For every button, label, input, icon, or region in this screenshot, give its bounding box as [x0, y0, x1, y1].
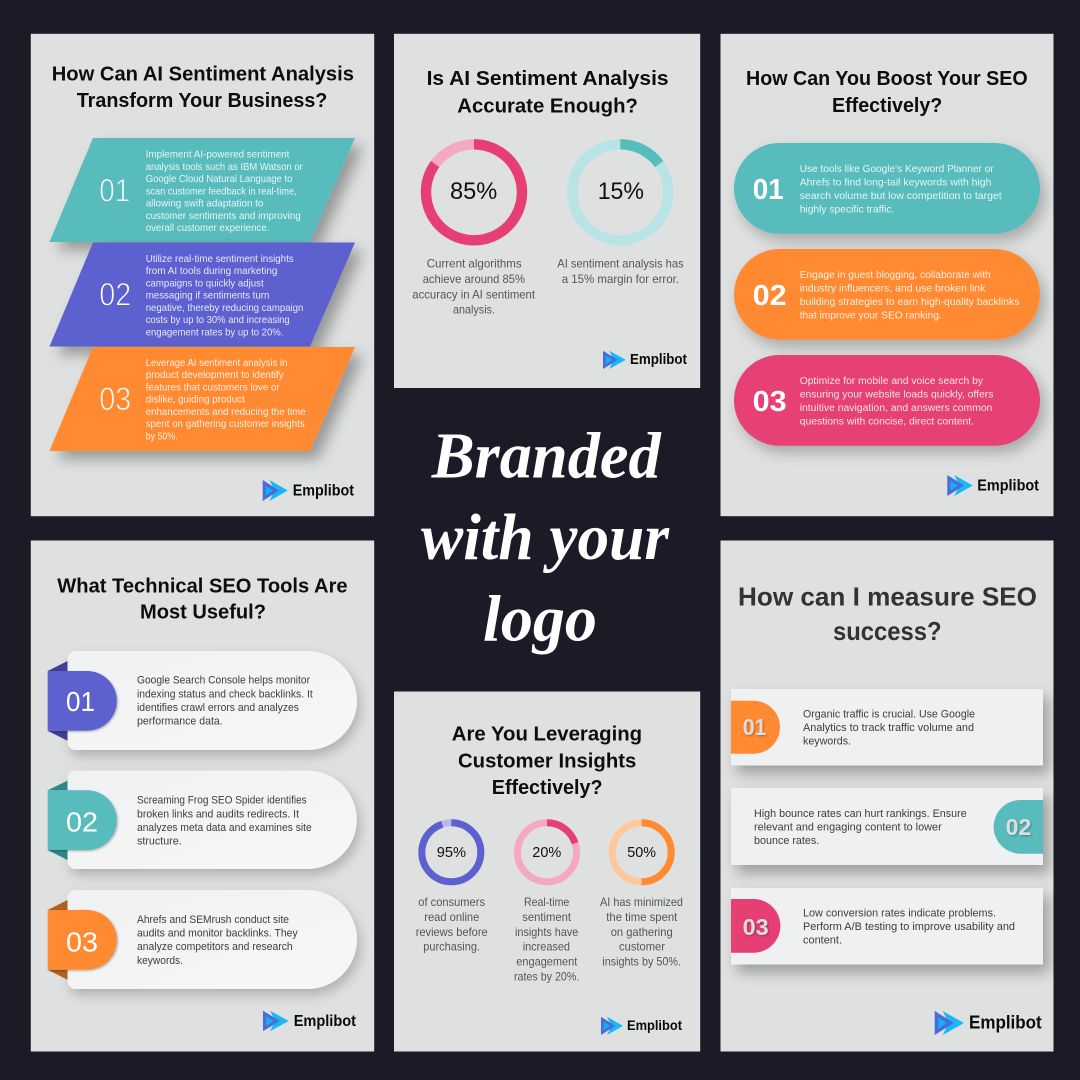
- caption: 85%: achieve around 85%: [423, 272, 525, 286]
- central title: Branded with your logo: with your: [421, 501, 670, 574]
- heading: panel 6: success?: [833, 616, 942, 646]
- step 02 pill: building strategies to earn high-quality backlinks: [800, 296, 1019, 308]
- step 03 parallelogram: by 50%.: [146, 430, 178, 442]
- heading: panel 2: Is AI Sentiment Analysis: [427, 67, 669, 90]
- tool card 01: [48, 651, 357, 750]
- step 03 pill: 03: [753, 386, 787, 418]
- tool card 01: performance data.: [137, 716, 223, 728]
- donut chart: 50%: 50%: [627, 845, 656, 861]
- donut chart: 95%: 95%: [437, 845, 466, 861]
- step 03 parallelogram: dislike, guiding product: [146, 394, 245, 406]
- caption: 50%: customer: [619, 940, 665, 954]
- heading: panel 5: Customer Insights: [458, 749, 636, 772]
- step 01 parallelogram: [50, 138, 355, 242]
- logo: panel 3: [947, 475, 1039, 496]
- step 01 pill: Ahrefs to find long-tail keywords with high: [800, 176, 992, 188]
- heading: panel 4: [57, 574, 348, 623]
- tool card 01: Google Search Console helps monitor: [137, 675, 310, 687]
- panel: Is AI Sentiment Analysis Accurate Enough: [394, 34, 700, 388]
- caption: 95%: reviews before: [416, 925, 488, 939]
- caption: 15%: AI sentiment analysis has: [557, 257, 684, 271]
- panel: How Can AI Sentiment Analysis Transform Your Business: [31, 34, 374, 516]
- step 01 parallelogram: scan customer feedback in real-time,: [146, 186, 297, 198]
- heading: panel 2: [427, 67, 669, 117]
- tool card 02: analyzes meta data and examines site: [137, 822, 312, 834]
- heading: panel 3: How Can You Boost Your SEO: [746, 67, 1028, 90]
- step 02 pill: 02: [753, 280, 787, 312]
- panel: Are You Leveraging Customer Insights Effectively: [394, 692, 700, 1052]
- caption: 85%: accuracy in AI sentiment: [412, 287, 536, 301]
- tool card 01: 01: [66, 686, 95, 717]
- heading: panel 1: How Can AI Sentiment Analysis: [52, 63, 354, 86]
- step 01 parallelogram: 01: [99, 173, 130, 209]
- heading: panel 4: Most Useful?: [140, 600, 266, 623]
- donut chart: 85%: 85%: [450, 178, 497, 205]
- tool card 01: identifies crawl errors and analyzes: [137, 702, 300, 714]
- metric card 02: [731, 788, 1043, 865]
- step 02 parallelogram: [50, 242, 355, 346]
- logo: panel 5: [601, 1017, 682, 1035]
- caption: 20%: Real-time: [524, 895, 570, 909]
- panel: How Can You Boost Your SEO Effectively: [720, 34, 1054, 516]
- caption: 95%: purchasing.: [423, 940, 480, 954]
- heading: panel 6: How can I measure SEO: [738, 582, 1037, 612]
- step 02 pill: Engage in guest blogging, collaborate with: [800, 269, 991, 281]
- step 01 parallelogram: customer sentiments and improving: [146, 210, 301, 222]
- step 03 parallelogram: product development to identify: [146, 369, 284, 381]
- step 03 pill: intuitive navigation, and answers common: [800, 402, 993, 414]
- logo: panel 4: [263, 1011, 356, 1031]
- step 01 pill: 01: [753, 174, 784, 206]
- caption: 15%: a 15% margin for error.: [562, 272, 679, 286]
- heading: panel 5: Are You Leveraging: [452, 723, 642, 746]
- caption: 85%: analysis.: [453, 303, 495, 317]
- step 03 parallelogram: spent on gathering customer insights: [146, 418, 305, 430]
- caption: 20%: insights have: [515, 925, 579, 939]
- step 01 parallelogram: Implement AI-powered sentiment: [146, 149, 289, 161]
- step 02 parallelogram: from AI tools during marketing: [146, 265, 278, 277]
- tool card 03: Ahrefs and SEMrush conduct site: [137, 914, 289, 926]
- step 03 pill: Optimize for mobile and voice search by: [800, 375, 984, 387]
- donut chart: 20%: 20%: [532, 845, 561, 861]
- metric card 03: 03: [743, 914, 769, 940]
- step 01 parallelogram: analysis tools such as IBM Watson or: [146, 161, 303, 173]
- caption: 20%: [514, 895, 579, 984]
- metric card 02: 02: [1006, 814, 1031, 840]
- caption: 15%: [557, 257, 684, 286]
- step 02 parallelogram: engagement rates by up to 20%.: [146, 326, 283, 338]
- logo: panel 6: Emplibot: [969, 1013, 1042, 1033]
- heading: panel 4: What Technical SEO Tools Are: [57, 574, 348, 597]
- caption: 50%: on gathering: [611, 925, 673, 939]
- central title: Branded with your logo: logo: [483, 583, 597, 656]
- step 02 pill: industry influencers, and use broken link: [800, 282, 986, 294]
- tool card 03: [48, 890, 357, 989]
- caption: 95%: of consumers: [418, 895, 485, 909]
- donut chart: 95%: [422, 823, 481, 882]
- step 02 parallelogram: messaging if sentiments turn: [146, 290, 270, 302]
- heading: panel 6: [738, 582, 1037, 646]
- step 01 parallelogram: allowing swift adaptation to: [146, 198, 264, 210]
- heading: panel 3: Effectively?: [832, 94, 942, 117]
- logo: panel 1: [263, 480, 354, 501]
- donut chart: 50%: [612, 823, 671, 882]
- donut chart: 15%: 15%: [598, 178, 644, 205]
- step 03 parallelogram: Leverage AI sentiment analysis in: [146, 357, 288, 369]
- logo: panel 3: Emplibot: [977, 477, 1039, 494]
- step 03 parallelogram: 03: [99, 381, 131, 417]
- step 03 parallelogram: enhancements and reducing the time: [146, 406, 306, 418]
- step 03 parallelogram: [50, 347, 355, 451]
- caption: 50%: the time spent: [606, 910, 678, 924]
- step 02 parallelogram: costs by up to 30% and increasing: [146, 314, 290, 326]
- tool card 03: keywords.: [137, 955, 183, 967]
- metric card 02: bounce rates.: [754, 835, 819, 847]
- caption: 50%: AI has minimized: [600, 895, 683, 909]
- tool card 02: structure.: [137, 836, 182, 848]
- tool card 03: 03: [66, 926, 98, 957]
- donut chart: 85%: [426, 144, 522, 240]
- step 02 parallelogram: campaigns to quickly adjust: [146, 278, 264, 290]
- step 01 parallelogram: overall customer experience.: [146, 222, 269, 234]
- tool card 03: audits and monitor backlinks. They: [137, 928, 298, 940]
- metric card 01: keywords.: [803, 736, 851, 748]
- logo: panel 2: [603, 351, 687, 369]
- step 02 parallelogram: negative, thereby reducing campaign: [146, 302, 304, 314]
- step 03 pill: [734, 355, 1040, 446]
- step 01 pill: [734, 143, 1040, 234]
- caption: 85%: [412, 257, 536, 317]
- caption: 95%: read online: [424, 910, 480, 924]
- metric card 03: Perform A/B testing to improve usability and: [803, 921, 1015, 933]
- logo: panel 1: Emplibot: [293, 483, 354, 500]
- metric card 01: 01: [743, 714, 767, 740]
- caption: 50%: insights by 50%.: [602, 955, 681, 969]
- tool card 02: broken links and audits redirects. It: [137, 808, 299, 820]
- logo: panel 6: [935, 1011, 1042, 1035]
- step 02 parallelogram: 02: [99, 277, 131, 313]
- step 02 pill: [734, 249, 1040, 340]
- heading: panel 5: [452, 723, 642, 799]
- caption: 20%: sentiment: [522, 910, 572, 924]
- step 03 parallelogram: features that customers love or: [146, 382, 280, 394]
- heading: panel 1: Transform Your Business?: [77, 89, 327, 112]
- tool card 03: analyze competitors and research: [137, 941, 293, 953]
- heading: panel 3: [746, 67, 1028, 117]
- heading: panel 2: Accurate Enough?: [457, 94, 638, 117]
- tool card 02: Screaming Frog SEO Spider identifies: [137, 795, 307, 807]
- metric card 01: [731, 689, 1043, 766]
- tool card 01: indexing status and check backlinks. It: [137, 688, 313, 700]
- caption: 95%: [416, 895, 488, 954]
- heading: panel 5: Effectively?: [492, 776, 602, 799]
- metric card 01: Organic traffic is crucial. Use Google: [803, 709, 975, 721]
- central title: Branded with your logo: [421, 419, 670, 656]
- step 01 pill: Use tools like Google's Keyword Planner or: [800, 163, 994, 175]
- caption: 50%: [600, 895, 683, 969]
- metric card 03: [731, 888, 1043, 964]
- caption: 20%: rates by 20%.: [514, 970, 579, 984]
- step 01 pill: highly specific traffic.: [800, 204, 894, 216]
- donut chart: 20%: [518, 823, 576, 882]
- logo: panel 4: Emplibot: [294, 1013, 356, 1030]
- metric card 03: content.: [803, 935, 842, 947]
- step 03 pill: ensuring your website loads quickly, offers: [800, 388, 993, 400]
- metric card 01: Analytics to track traffic volume and: [803, 722, 974, 734]
- panel: What Technical SEO Tools Are Most Useful: [31, 540, 374, 1052]
- donut chart: 15%: [572, 144, 668, 240]
- caption: 20%: increased: [523, 940, 570, 954]
- heading: panel 1: [52, 63, 354, 112]
- logo: panel 5: Emplibot: [627, 1017, 682, 1033]
- step 02 pill: that improve your SEO ranking.: [800, 310, 942, 322]
- step 01 parallelogram: Google Cloud Natural Language to: [146, 173, 293, 185]
- metric card 03: Low conversion rates indicate problems.: [803, 908, 996, 920]
- step 02 parallelogram: Utilize real-time sentiment insights: [146, 253, 294, 265]
- panel: How can I measure SEO success: [720, 540, 1054, 1052]
- tool card 02: 02: [66, 806, 98, 837]
- metric card 02: relevant and engaging content to lower: [754, 822, 942, 834]
- central title: Branded with your logo: Branded: [431, 419, 662, 492]
- step 01 pill: search volume but low competition to target: [800, 190, 1002, 202]
- caption: 20%: engagement: [516, 955, 578, 969]
- logo: panel 2: Emplibot: [630, 352, 687, 368]
- step 03 pill: questions with concise, direct content.: [800, 416, 974, 428]
- caption: 85%: Current algorithms: [427, 257, 522, 271]
- tool card 02: [48, 770, 357, 869]
- metric card 02: High bounce rates can hurt rankings. Ensure: [754, 808, 967, 820]
